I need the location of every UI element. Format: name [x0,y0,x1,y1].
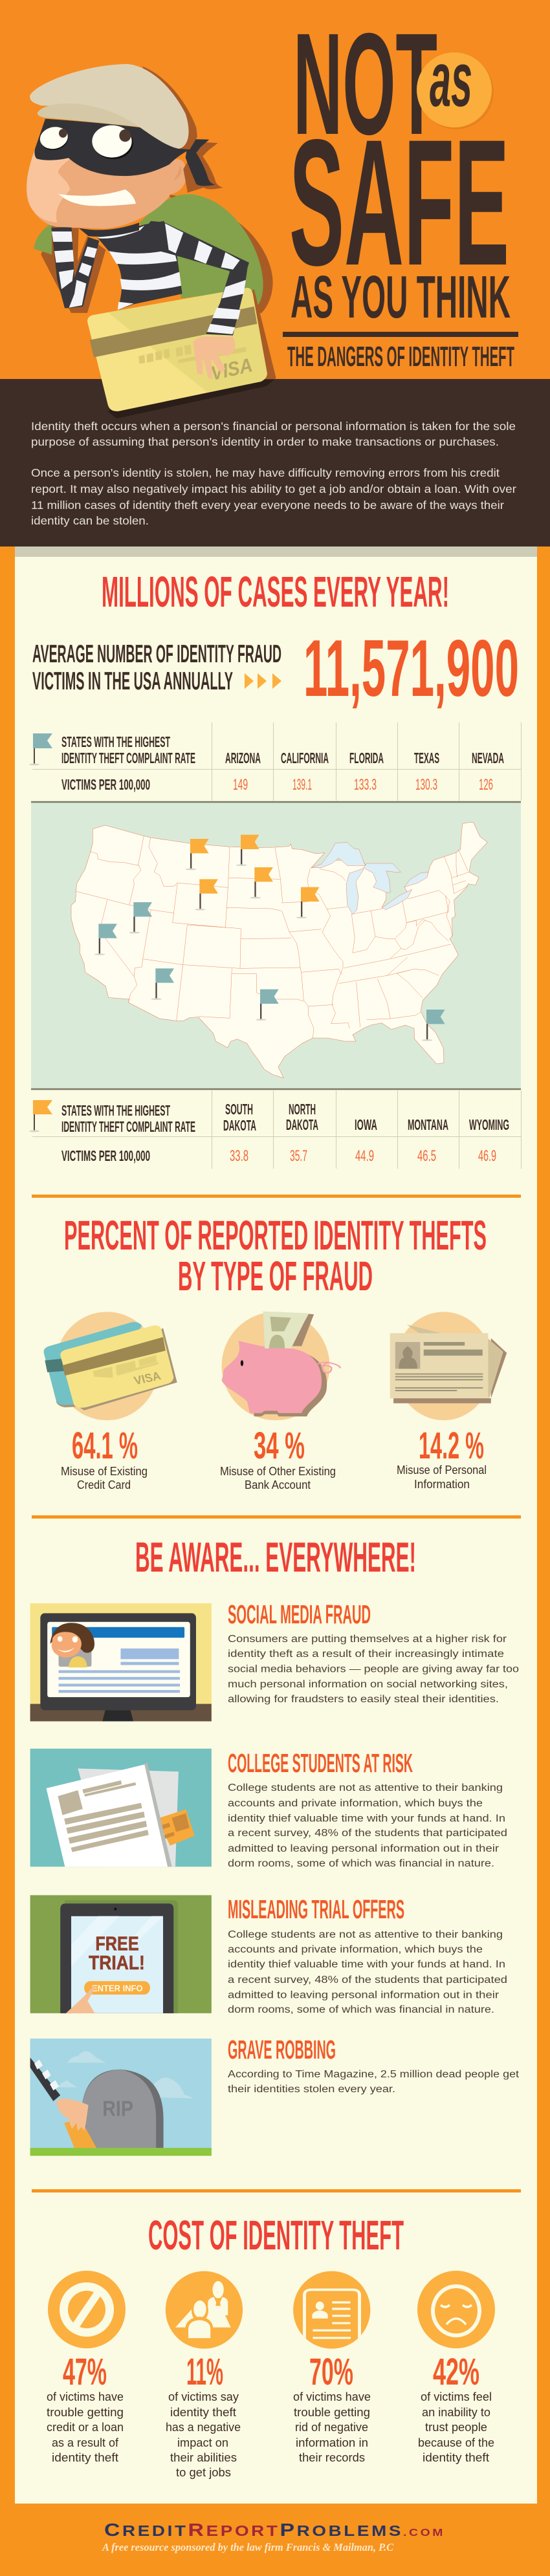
social media fraud text: SOCIAL MEDIA FRAUD [228,1599,371,1629]
table header label [61,1102,195,1135]
hat brim [38,103,140,127]
college students text [228,1748,507,1869]
stat: 47%: of victims have [47,2390,124,2403]
mask [34,119,190,176]
victims row: 149 [233,776,248,794]
misleading trial offers text: identity thief valuable time with your funds at hand. In [228,1959,505,1970]
card shadow [108,289,276,418]
stat: 14.2%: Misuse of Personal [397,1464,487,1477]
stat: 70%: trouble getting [294,2406,370,2419]
stat: 42%: because of the [418,2436,494,2449]
victims row [61,776,493,794]
stat: 64.1%: Misuse of Existing [61,1465,148,1478]
stat: 47%: credit or a loan [47,2421,124,2434]
intro paragraph two: identity can be stolen. [31,514,149,527]
stat: 14.2%: Information [414,1478,470,1491]
icon: sad face [417,2271,495,2348]
college students text: College students are not as attentive to their banking [228,1782,503,1793]
stat: 14.2%: 14.2 % [419,1425,484,1467]
stat: 70%: 70% [309,2351,353,2393]
right arm [138,221,249,336]
stat: 11% [166,2351,241,2479]
stat: 47% [47,2351,124,2464]
stat: 14.2% [397,1425,487,1491]
victims row: 33.8 [230,1147,248,1165]
social media fraud text: identity theft as a result of their increasingly intimate [228,1649,504,1660]
title block [283,3,518,373]
smile [59,189,136,206]
college students text: accounts and private information, which buys the [228,1798,483,1809]
header orange band [0,0,550,379]
arrows [245,673,281,689]
stat: 11%: has a negative [166,2421,241,2434]
victims row: 44.9 [355,1147,374,1165]
state names: CALIFORNIA [281,750,329,766]
stat: 42%: 42% [433,2351,479,2393]
stat label [32,640,281,695]
intro paragraph one: Identity theft occurs when a person's financial or personal information is taken for the sole [31,420,516,433]
stat: 34%: 34 % [254,1425,305,1467]
misleading trial offers text [228,1894,507,2015]
stat: 42% [418,2351,494,2464]
misleading trial offers text: College students are not as attentive to their banking [228,1929,503,1940]
heading: percent of reported identity thefts [64,1212,487,1299]
visa mark: VISA [209,354,254,385]
table: lowest complaint states [29,1090,522,1169]
footer tagline: A free resource sponsored by the law firm Francis & Mailman, P.C [102,2541,394,2553]
fraud type: documents icon [390,1312,507,1420]
stat: 64.1%: 64.1 % [72,1425,138,1467]
state names: NEVADA [472,750,504,766]
table header label [61,733,195,766]
state names: DAKOTA [223,1117,256,1134]
victims row: 46.5 [417,1147,436,1165]
map background [31,802,521,1089]
college students text: dorm rooms, some of which was financial in nature. [228,1858,494,1869]
social media fraud text: much personal information on social networking sites, [228,1679,508,1690]
victims row: 35.7 [290,1147,307,1165]
visa mark: VISA [131,1369,163,1387]
intro paragraph two: report. It may also negatively impact his ability to get a job and/or obtain a loan. With over [31,482,516,495]
icon: no sign [48,2271,126,2348]
state names: FLORIDA [349,750,384,766]
state names [223,1101,509,1134]
intro paragraph one: purpose of assuming that person's identity in order to make transactions or purchases. [31,435,499,448]
grave robbing text: GRAVE ROBBING [228,2035,336,2064]
teal flags [94,902,445,1041]
stat: 64.1%: Credit Card [77,1478,131,1491]
illustration: thief with credit card [27,64,276,418]
stat: 34%: Bank Account [245,1478,311,1491]
stat: 34% [220,1425,336,1491]
social media fraud text: allowing for fraudsters to easily steal their identities. [228,1694,499,1705]
icon: teal flag [29,733,52,766]
table header label: IDENTITY THEFT COMPLAINT RATE [61,1118,195,1135]
stat: 47%: 47% [63,2351,107,2393]
victims row: 139.1 [292,776,312,794]
table header label: STATES WITH THE HIGHEST [61,733,170,750]
table header label: STATES WITH THE HIGHEST [61,1102,170,1119]
stat: 70%: their records [299,2451,365,2464]
table header label: IDENTITY THEFT COMPLAINT RATE [61,750,195,766]
head [27,146,187,229]
stat: 11%: impact on [177,2436,228,2449]
badge: as: as [430,36,472,123]
free trial text: FREE [95,1933,139,1955]
stat: 11%: their abilities [170,2451,237,2464]
rip text: RIP [102,2097,133,2121]
stat: 47%: as a result of [52,2436,119,2449]
content panel [15,547,537,2504]
social media fraud text [228,1599,519,1705]
hand [193,336,235,379]
grave robbing text: their identities stolen every year. [228,2084,395,2095]
state names: MONTANA [408,1116,448,1133]
credit card [87,288,267,411]
eyes [38,125,133,159]
state names: NORTH [289,1101,316,1118]
victims row: 126 [479,776,493,794]
badge: as [417,36,494,129]
free trial text [89,1933,145,1974]
stat: 11%: 11% [186,2351,223,2393]
victims row: 133.3 [354,776,377,794]
great lakes [312,843,428,915]
stat: 42%: identity theft [423,2451,489,2464]
victims row [61,1147,496,1165]
text: AVERAGE NUMBER OF IDENTITY FRAUD [32,640,281,668]
intro paragraph two: 11 million cases of identity theft every year everyone needs to be aware of the ways their [31,499,504,512]
grave robbing text [228,2035,520,2095]
arm shadow [41,224,105,313]
misleading trial offers text: dorm rooms, some of which was financial in nature. [228,2004,494,2015]
state names: WYOMING [469,1116,509,1133]
stat: 42%: an inability to [422,2406,490,2419]
misleading trial offers text: a recent survey, 48% of the students that participated [228,1975,507,1986]
state names: TEXAS [414,750,439,766]
stat: 70%: rid of negative [295,2421,368,2434]
state names: DAKOTA [286,1116,318,1133]
grave robbing text: According to Time Magazine, 2.5 million dead people get [228,2069,520,2080]
stat: 34%: Misuse of Other Existing [220,1465,336,1478]
misleading trial offers text: accounts and private information, which buys the [228,1944,483,1955]
intro paragraph two: Once a person's identity is stolen, he may have difficulty removing errors from his credit [31,466,500,479]
stat: 42%: trust people [425,2421,487,2434]
victims row: VICTIMS PER 100,000 [61,776,150,793]
social media fraud text: social media behaviors — people are giving away far too [228,1663,519,1675]
bag [139,194,263,308]
hat [30,64,189,149]
panel top shadow strip [15,547,537,557]
college students text: identity thief valuable time with your funds at hand. In [228,1813,505,1824]
intro paragraph two [31,466,516,527]
free trial text: TRIAL! [89,1952,145,1974]
illustration: grave robbing [30,2039,212,2156]
stat: 42%: of victims feel [421,2390,492,2403]
title rule [283,332,518,337]
stat: 70%: information in [296,2436,368,2449]
land [71,823,487,1078]
victims row: 130.3 [415,776,437,794]
intro dark band [0,379,550,547]
stat: 47%: trouble getting [47,2406,124,2419]
state names: IOWA [355,1116,377,1133]
torso [97,221,182,310]
illustration: documents on teal [30,1749,212,1867]
social media fraud text: Consumers are putting themselves at a higher risk for [228,1634,507,1645]
illustration: social media monitor [30,1603,212,1722]
illustration: free trial tablet [30,1895,212,2013]
table: highest complaint states [29,722,522,801]
state names [225,750,504,766]
fraud type: credit card icon [44,1312,177,1420]
bandana knot shadow [183,142,223,193]
stat: 47%: identity theft [52,2451,118,2464]
illustration: free trial tablet: ENTER INFO [92,1983,143,1993]
icon: record document [293,2271,370,2350]
orange flags [186,835,320,918]
map of the USA [71,823,487,1078]
victims row: VICTIMS PER 100,000 [61,1147,150,1164]
map rules [31,802,521,1089]
bandana knot [186,139,215,186]
college students text: admitted to leaving personal information out in their [228,1843,499,1854]
stat label: VICTIMS IN THE USA ANNUALLY [32,667,233,695]
stat: 64.1% [61,1425,148,1491]
bag strap [34,223,52,255]
fraud type: piggy bank icon [222,1312,340,1420]
left arm [51,227,99,308]
state borders [76,836,469,1038]
intro paragraph one [31,420,516,448]
misleading trial offers text: admitted to leaving personal information out in their [228,1989,499,2001]
footer logo: CREDIT REPORT PROBLEMS .COM [104,2520,445,2540]
icon: people at a table [166,2271,243,2349]
collar [79,222,139,237]
stat: 11%: of victims say [168,2390,239,2403]
icon: orange flag [29,1100,52,1132]
college students text: a recent survey, 48% of the students that participated [228,1828,507,1839]
bag shadow [168,195,273,314]
hat shadow [142,66,197,149]
state names: ARIZONA [225,750,261,766]
victims row: 46.9 [478,1147,496,1165]
stat: 11%: to get jobs [176,2466,231,2479]
stat: 11%: identity theft [170,2406,236,2419]
stat: 70%: of victims have [293,2390,371,2403]
state names: SOUTH [225,1101,253,1118]
stat: 70% [293,2351,371,2464]
